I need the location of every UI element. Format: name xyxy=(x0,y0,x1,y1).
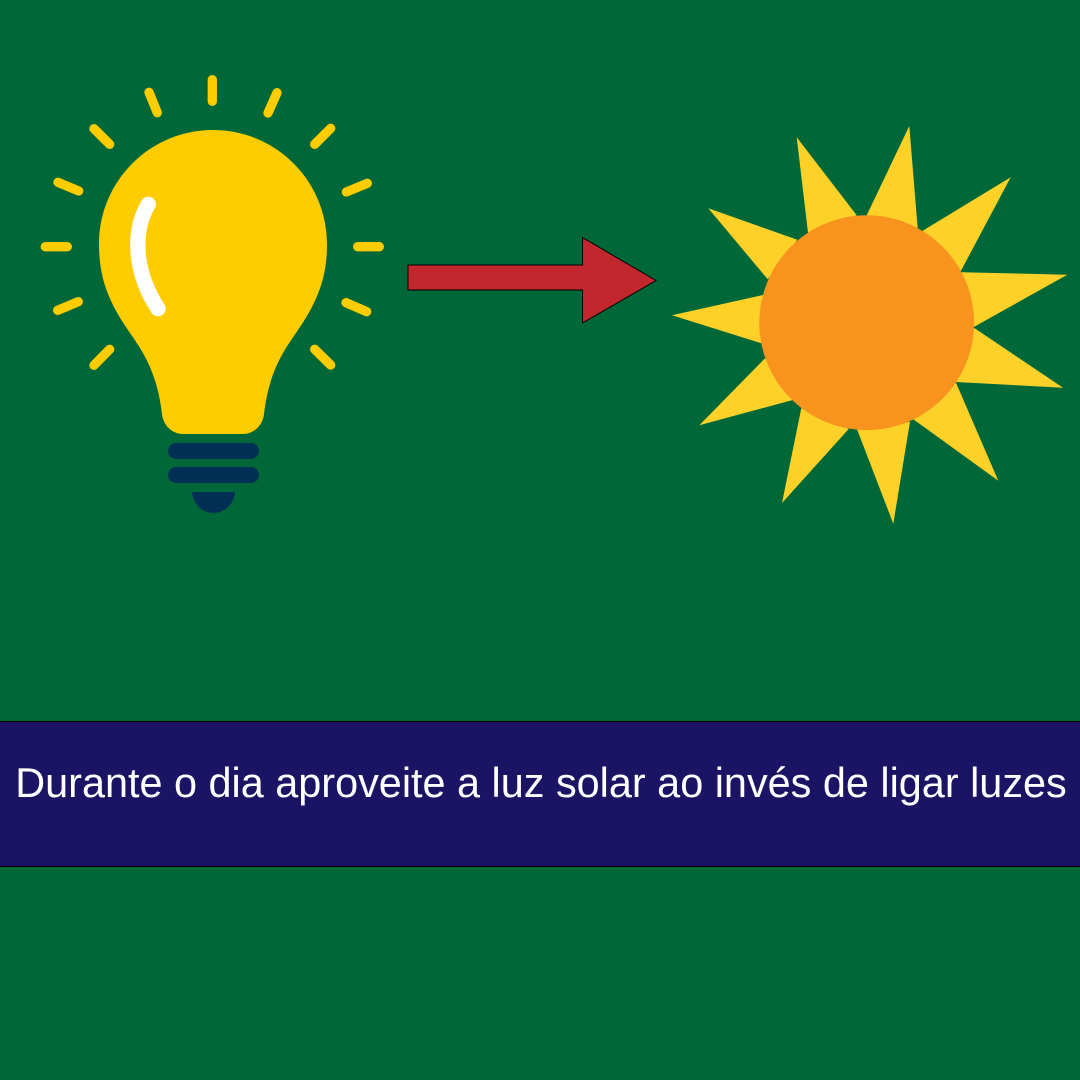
bulb rays xyxy=(45,80,379,365)
icon: light bulb xyxy=(45,80,379,513)
sun rays xyxy=(672,126,1067,524)
bulb highlight xyxy=(138,204,158,309)
bulb base xyxy=(168,443,259,513)
arrow xyxy=(408,238,656,323)
sun disc xyxy=(759,215,974,430)
bulb glass xyxy=(99,130,327,434)
icon: sun xyxy=(672,126,1067,524)
caption text: Durante o dia aproveite a luz solar ao invés de ligar luzes xyxy=(15,760,1067,806)
banner xyxy=(0,721,1080,867)
